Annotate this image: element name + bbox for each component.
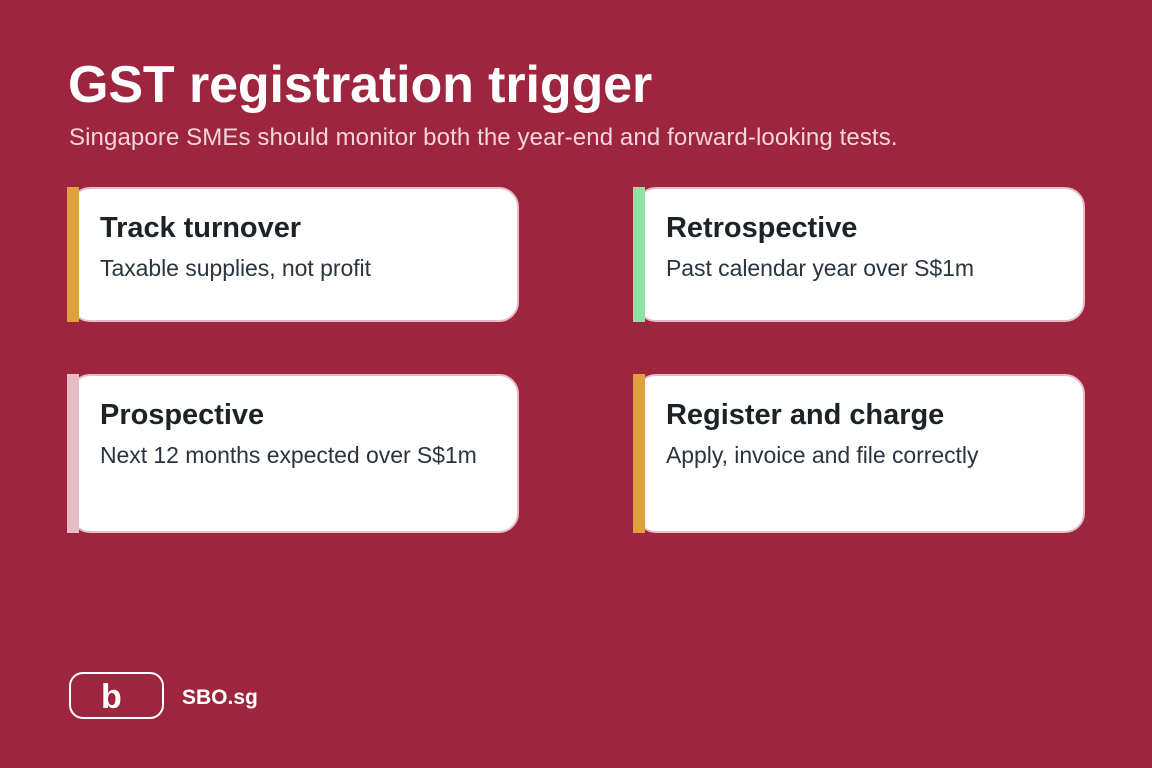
- logo badge: b: [101, 678, 122, 716]
- panel: register and charge: [633, 374, 1085, 533]
- panel: retrospective: Retrospective: [666, 212, 857, 244]
- panel: register and charge: Register and charge: [666, 399, 944, 431]
- panel: track turnover: [67, 187, 519, 322]
- panel: track turnover: Taxable supplies, not profit: [100, 255, 371, 281]
- title: GST registration trigger: [68, 56, 652, 114]
- panel: prospective: [67, 374, 519, 533]
- brand name: SBO.sg: [182, 686, 258, 709]
- panel: register and charge: Apply, invoice and file correctly: [666, 442, 978, 468]
- subtitle: Singapore SMEs should monitor both the year-end and forward-looking tests.: [69, 124, 898, 151]
- logo badge: [69, 672, 164, 719]
- panel: prospective: Prospective: [100, 399, 264, 431]
- panel: retrospective: [633, 187, 1085, 322]
- panel: retrospective: Past calendar year over S$1m: [666, 255, 974, 281]
- panel: track turnover: Track turnover: [100, 212, 301, 244]
- panel: prospective: Next 12 months expected over S$1m: [100, 442, 477, 468]
